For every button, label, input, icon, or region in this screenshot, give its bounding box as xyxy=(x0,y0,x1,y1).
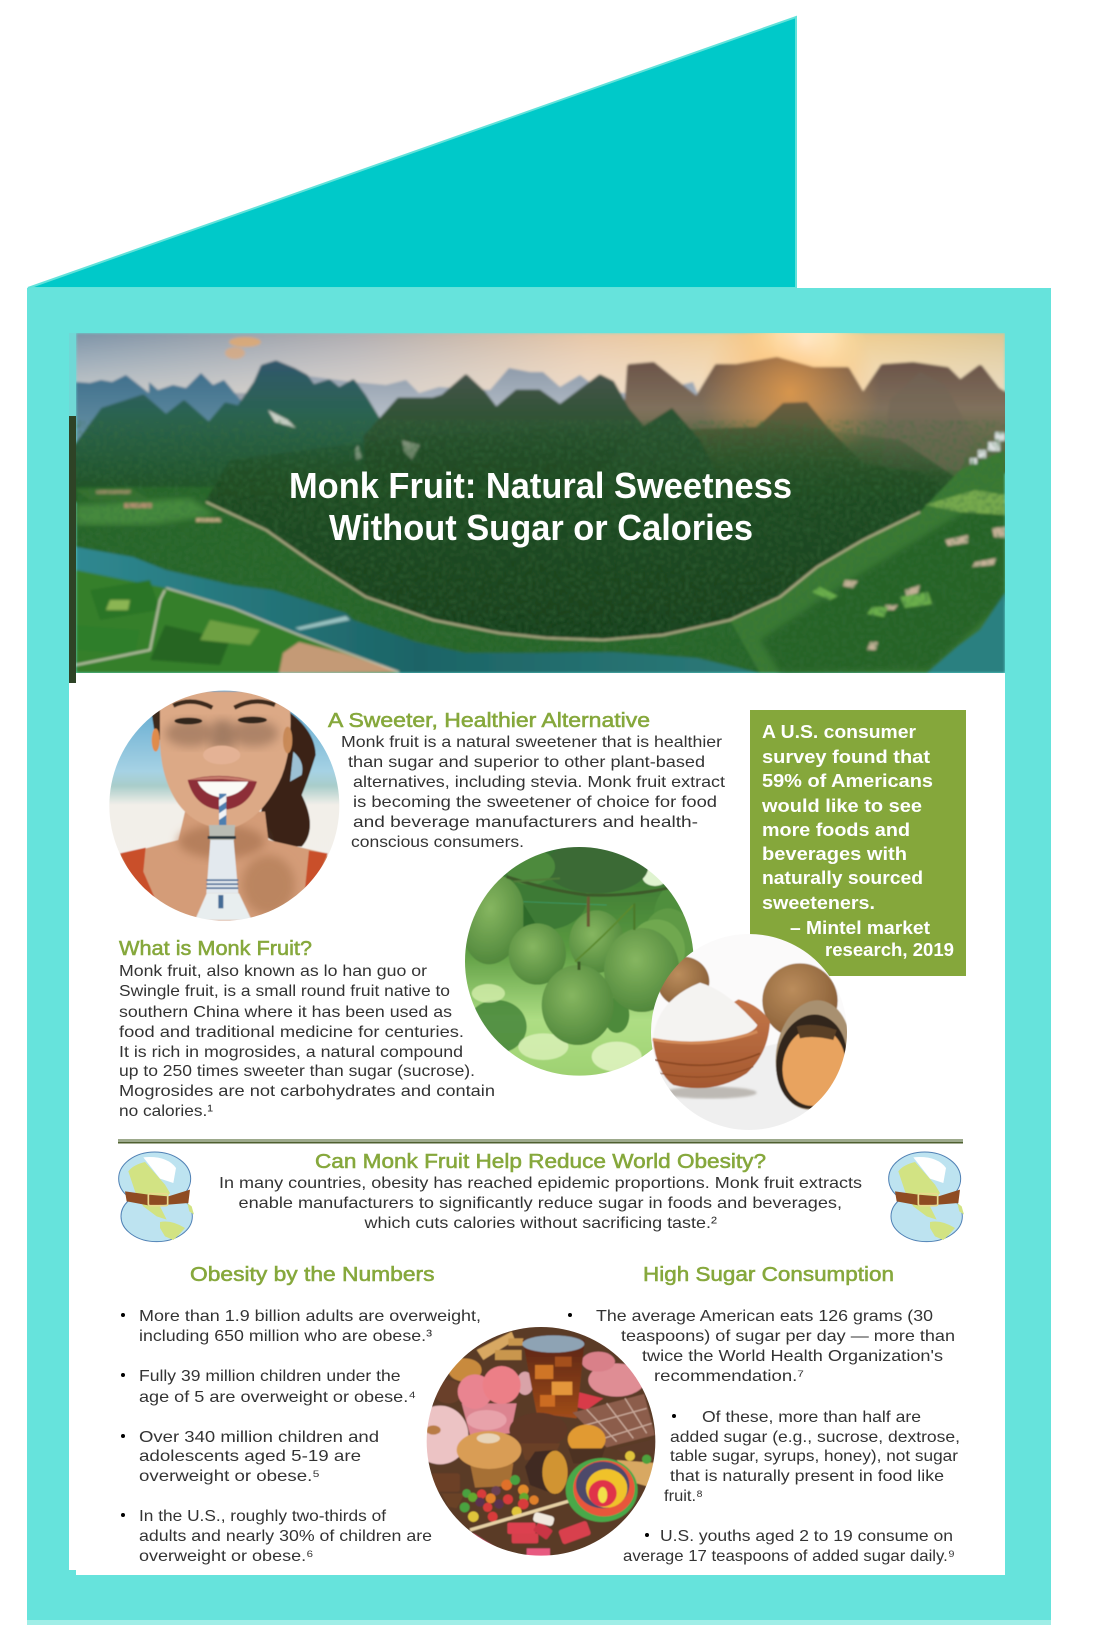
text: what is monk fruit paragraph: southern China where it has been used as xyxy=(119,1004,452,1021)
text: what is monk fruit paragraph: It is rich in mogrosides, a natural compound xyxy=(119,1044,463,1061)
list: sugar statistics: average 17 teaspoons of added sugar daily.⁹ xyxy=(623,1548,955,1565)
callout text: beverages with xyxy=(762,843,907,864)
callout text: survey found that xyxy=(762,746,930,767)
list: sugar statistics: twice the World Health Organization's xyxy=(642,1348,943,1365)
folder frame xyxy=(27,288,1051,1625)
heading: can monk fruit help reduce world obesity: Can Monk Fruit Help Reduce World Obesity? xyxy=(315,1151,766,1173)
callout text: 59% of Americans xyxy=(762,770,933,791)
title xyxy=(289,465,792,548)
icon: globe with belt, right xyxy=(889,1152,964,1242)
text: alternative paragraph: conscious consumers. xyxy=(351,834,524,851)
heading: what is monk fruit: What is Monk Fruit? xyxy=(119,938,312,960)
folder tab xyxy=(28,17,796,288)
list: obesity statistics: Over 340 million children and xyxy=(139,1429,379,1446)
list: obesity statistics: Fully 39 million children under the xyxy=(139,1368,401,1385)
list: obesity statistics: adolescents aged 5-19 are xyxy=(139,1448,361,1465)
text: what is monk fruit paragraph xyxy=(119,963,495,1120)
text: alternative paragraph: alternatives, including stevia. Monk fruit extract xyxy=(353,774,726,791)
callout text: more foods and xyxy=(762,819,910,840)
heading: obesity by the numbers: Obesity by the Numbers xyxy=(190,1264,434,1286)
callout text: would like to see xyxy=(761,795,922,816)
list: sugar statistics: table sugar, syrups, honey), not sugar xyxy=(670,1448,959,1465)
list: sugar statistics: recommendation.⁷ xyxy=(654,1368,804,1385)
heading: a sweeter, healthier alternative: A Sweeter, Healthier Alternative xyxy=(328,710,650,732)
callout text: – Mintel market xyxy=(790,917,930,938)
list: obesity statistics: adults and nearly 30% of children are xyxy=(139,1528,432,1545)
white content panel xyxy=(69,333,1005,1575)
list: sugar statistics: fruit.⁸ xyxy=(664,1488,703,1505)
text: alternative paragraph xyxy=(341,734,726,851)
photo: green monk fruit on the vine xyxy=(465,847,694,1076)
text: what is monk fruit paragraph: Swingle fruit, is a small round fruit native to xyxy=(119,983,450,1000)
title: Monk Fruit: Natural Sweetness xyxy=(289,465,792,506)
list: obesity statistics: In the U.S., roughly two-thirds of xyxy=(139,1508,387,1525)
callout box xyxy=(750,710,966,976)
text: obesity intro: enable manufacturers to significantly reduce sugar in foods and beverages, xyxy=(238,1195,842,1212)
title: Without Sugar or Calories xyxy=(329,507,753,548)
photo: sugar bowl and dried monk fruit xyxy=(650,933,858,1133)
text: alternative paragraph: than sugar and superior to other plant-based xyxy=(348,754,705,771)
text: what is monk fruit paragraph: up to 250 times sweeter than sugar (sucrose). xyxy=(119,1063,475,1080)
list: sugar statistics: The average American eats 126 grams (30 xyxy=(596,1308,933,1325)
text: alternative paragraph: is becoming the sweetener of choice for food xyxy=(353,794,717,811)
callout text: naturally sourced xyxy=(762,867,923,888)
list: obesity statistics: including 650 million who are obese.³ xyxy=(139,1328,433,1345)
text: what is monk fruit paragraph: no calories.¹ xyxy=(119,1103,213,1120)
list: obesity statistics: overweight or obese.⁵ xyxy=(139,1468,320,1485)
callout text xyxy=(761,721,954,960)
list: sugar statistics: U.S. youths aged 2 to 19 consume on xyxy=(660,1528,953,1545)
callout text: research, 2019 xyxy=(825,939,954,960)
callout text: sweeteners. xyxy=(762,892,875,913)
text: what is monk fruit paragraph: Mogrosides are not carbohydrates and contain xyxy=(119,1083,495,1100)
callout text: A U.S. consumer xyxy=(762,721,916,742)
hero landscape photo xyxy=(76,333,1005,673)
list: sugar statistics: Of these, more than half are xyxy=(702,1409,921,1426)
photo: smiling woman with bottle xyxy=(105,685,345,925)
text: obesity intro: In many countries, obesity has reached epidemic proportions. Monk fruit extracts xyxy=(219,1175,862,1192)
list: sugar statistics: teaspoons) of sugar per day — more than xyxy=(621,1328,955,1345)
list: sugar statistics: added sugar (e.g., sucrose, dextrose, xyxy=(670,1429,960,1446)
text: obesity intro xyxy=(219,1175,862,1232)
list: obesity statistics xyxy=(121,1308,481,1565)
text: what is monk fruit paragraph: Monk fruit, also known as lo han guo or xyxy=(119,963,428,980)
heading: high sugar consumption: High Sugar Consumption xyxy=(643,1264,894,1286)
list: obesity statistics: age of 5 are overweight or obese.⁴ xyxy=(139,1389,416,1406)
icon: globe with belt, left xyxy=(119,1152,194,1242)
text: alternative paragraph: and beverage manufacturers and health- xyxy=(353,814,698,831)
text: alternative paragraph: Monk fruit is a natural sweetener that is healthier xyxy=(341,734,723,751)
photo: sweets and sugary foods xyxy=(426,1327,656,1556)
text: what is monk fruit paragraph: food and traditional medicine for centuries. xyxy=(119,1024,464,1041)
list: obesity statistics: overweight or obese.⁶ xyxy=(139,1548,314,1565)
list: sugar statistics xyxy=(568,1308,960,1565)
list: obesity statistics: More than 1.9 billion adults are overweight, xyxy=(139,1308,481,1325)
text: obesity intro: which cuts calories without sacrificing taste.² xyxy=(363,1215,718,1232)
list: sugar statistics: that is naturally present in food like xyxy=(670,1468,944,1485)
